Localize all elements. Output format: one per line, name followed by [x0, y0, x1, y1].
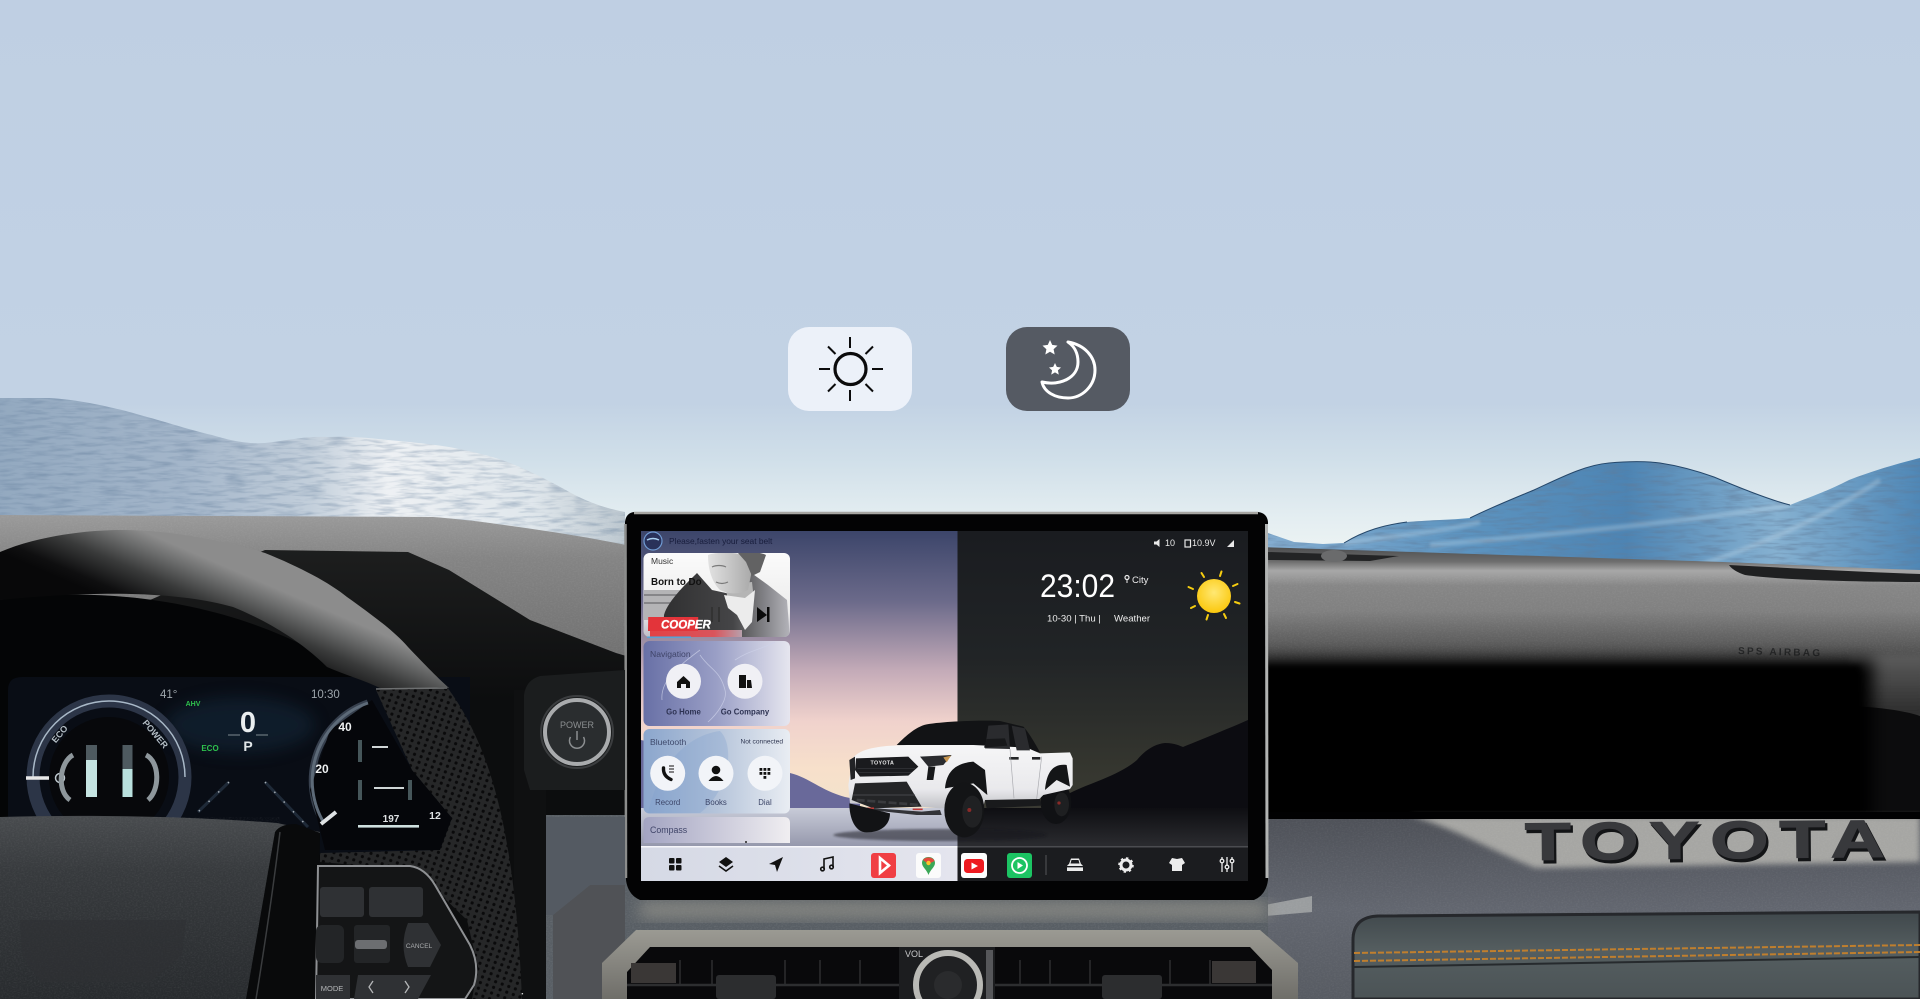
light theme button — [788, 327, 912, 411]
COOPER logo — [648, 617, 712, 632]
card: bluetooth: Bluetooth — [650, 737, 687, 747]
right gauge: 197 — [383, 814, 400, 825]
lower bumper — [852, 782, 922, 808]
dock separator — [1046, 855, 1047, 875]
cancel button — [404, 923, 441, 967]
location — [1125, 575, 1149, 586]
icon: navigation arrow — [769, 857, 783, 872]
left gauge: ECO — [50, 723, 70, 745]
icon: carplay app — [1007, 853, 1032, 878]
dashboard left top — [0, 515, 640, 700]
status bar right: 10 — [1165, 538, 1175, 548]
dark half of screen — [957, 531, 1249, 881]
music label: Music — [651, 556, 674, 566]
truck illustration — [833, 721, 1073, 841]
display bezel — [625, 512, 1268, 900]
black dashboard recess — [1255, 655, 1920, 825]
speaker grille — [1729, 565, 1920, 582]
status bar right: 10.9V — [1192, 538, 1216, 548]
album art: man in jacket — [644, 552, 790, 640]
red album stripe — [650, 630, 742, 637]
dashboard hood shadow — [0, 550, 640, 999]
control panel — [316, 866, 476, 999]
underbody — [985, 799, 1042, 808]
cab roof and glass — [897, 721, 1040, 752]
go home button: Go Home — [666, 708, 701, 716]
card: navigation: Navigation — [650, 649, 691, 659]
right gauge: 12 — [429, 810, 441, 822]
record button — [650, 756, 685, 807]
go company button: Go Company — [721, 708, 770, 716]
center display — [625, 512, 1268, 900]
center console — [514, 690, 1268, 999]
icon: music note — [821, 857, 833, 871]
dock dark — [957, 846, 1249, 881]
perforated grip — [320, 687, 522, 999]
books button — [698, 756, 734, 807]
arrow buttons — [354, 975, 431, 999]
front right wheel — [944, 783, 984, 837]
mode button: MODE — [321, 984, 343, 993]
TOYOTA emblem lettering: TOYOTA — [1525, 809, 1896, 871]
door details — [1009, 757, 1040, 760]
vent slats — [627, 960, 1272, 985]
defrost slot — [1268, 552, 1399, 561]
card: compass: Compass — [650, 825, 688, 835]
icon: settings gear — [1119, 858, 1133, 872]
skid plate — [867, 808, 942, 815]
right gauge — [310, 700, 452, 850]
cluster glow — [165, 697, 315, 753]
TOYOTA emblem lettering: TOYOTA — [1527, 812, 1898, 874]
icon: red play app — [871, 853, 896, 878]
icon: car — [1067, 858, 1083, 871]
vent tab right — [1102, 975, 1162, 999]
icon: weather sun — [1188, 572, 1240, 620]
right gauge: 40 — [338, 720, 352, 734]
volume knob — [916, 953, 980, 999]
weather label: Weather — [1114, 614, 1151, 624]
truck body — [848, 745, 1073, 808]
steering wheel — [0, 530, 522, 999]
distant hill — [641, 740, 860, 812]
lower right trim — [1260, 812, 1920, 999]
cluster clock: 10:30 — [311, 689, 340, 701]
go company button — [721, 664, 770, 716]
lower console panel left of display — [546, 817, 625, 915]
side windows — [985, 724, 1010, 749]
COOPER logo: COOPER — [661, 620, 712, 632]
icon: maps app — [916, 853, 941, 878]
speed and gear readout — [228, 712, 268, 751]
status bar right — [1154, 538, 1234, 548]
go home button — [666, 664, 701, 716]
sky background — [0, 0, 1920, 560]
books button: Books — [705, 798, 727, 807]
AHV indicator: AHV — [186, 701, 201, 708]
air vent frame — [602, 930, 1298, 999]
right gauge: 20 — [315, 762, 329, 776]
pause icon — [711, 607, 720, 622]
left snowy hills — [0, 398, 625, 544]
headlight — [920, 755, 952, 767]
date: 10-30 | Thu | — [1047, 614, 1101, 624]
dial button: Dial — [758, 798, 772, 807]
SPS AIRBAG marking: SPS AIRBAG — [1738, 646, 1820, 659]
icon: youtube app — [961, 853, 987, 878]
icon: sun outline — [819, 337, 883, 401]
icon: crescent moon and stars — [1042, 340, 1095, 398]
status bar left: Please,fasten your seat belt — [669, 536, 773, 546]
speed and gear readout: P — [243, 738, 253, 754]
black spoke — [246, 824, 320, 999]
location: City — [1132, 575, 1149, 586]
glove box panel with orange stitching — [1353, 912, 1920, 999]
icon: app grid — [669, 858, 682, 870]
power button: POWER — [560, 720, 594, 730]
mirror — [984, 738, 1007, 748]
cancel button: CANCEL — [406, 943, 433, 950]
next icon — [757, 607, 770, 622]
temperature: 41° — [160, 689, 177, 701]
grille — [855, 757, 918, 777]
rear wheel — [1041, 781, 1071, 824]
card: bluetooth: Not connected — [740, 738, 783, 746]
right blue hills — [1268, 458, 1920, 570]
power button panel — [524, 670, 625, 790]
wheel rim — [0, 530, 449, 692]
scene: dashboard with day and night display — [0, 327, 1920, 999]
button: drive mode right — [369, 887, 423, 917]
icon: speaker — [1154, 539, 1160, 547]
light half of screen — [641, 531, 958, 881]
rear arch — [1045, 765, 1070, 790]
record button: Record — [655, 798, 680, 807]
ECO indicator: ECO — [201, 744, 219, 753]
vent tab left — [716, 975, 776, 999]
status bar left — [644, 532, 773, 550]
grille: TOYOTA — [870, 760, 894, 766]
dock icons — [669, 853, 1234, 878]
icon: layers — [719, 857, 733, 871]
card: music — [644, 552, 790, 640]
horn pad — [0, 816, 320, 999]
lane guide lines — [198, 782, 308, 827]
instrument cluster — [8, 677, 470, 855]
icon: t-shirt — [1169, 858, 1185, 871]
front left wheel — [849, 803, 890, 832]
song title: Born to Do — [651, 577, 702, 588]
instrument hood — [0, 595, 480, 860]
clock: 23:02 — [1040, 568, 1115, 604]
dock light — [641, 846, 958, 881]
dark theme button — [1006, 327, 1130, 411]
button: drive mode left — [320, 887, 364, 917]
dashboard right top — [1260, 547, 1920, 999]
speed and gear readout: 0 — [240, 707, 256, 739]
card: compass — [644, 817, 790, 843]
icon: equalizer sliders — [1220, 857, 1234, 872]
card: bluetooth — [644, 729, 790, 814]
dial button — [748, 756, 782, 807]
volume label: VOL — [905, 949, 923, 959]
night hill silhouette — [1060, 720, 1248, 812]
left gauge: POWER — [141, 718, 170, 751]
mode button — [316, 975, 350, 999]
cruise control buttons — [316, 925, 390, 963]
front arch — [945, 762, 987, 795]
card: navigation — [644, 641, 790, 726]
left gauge — [26, 694, 192, 818]
